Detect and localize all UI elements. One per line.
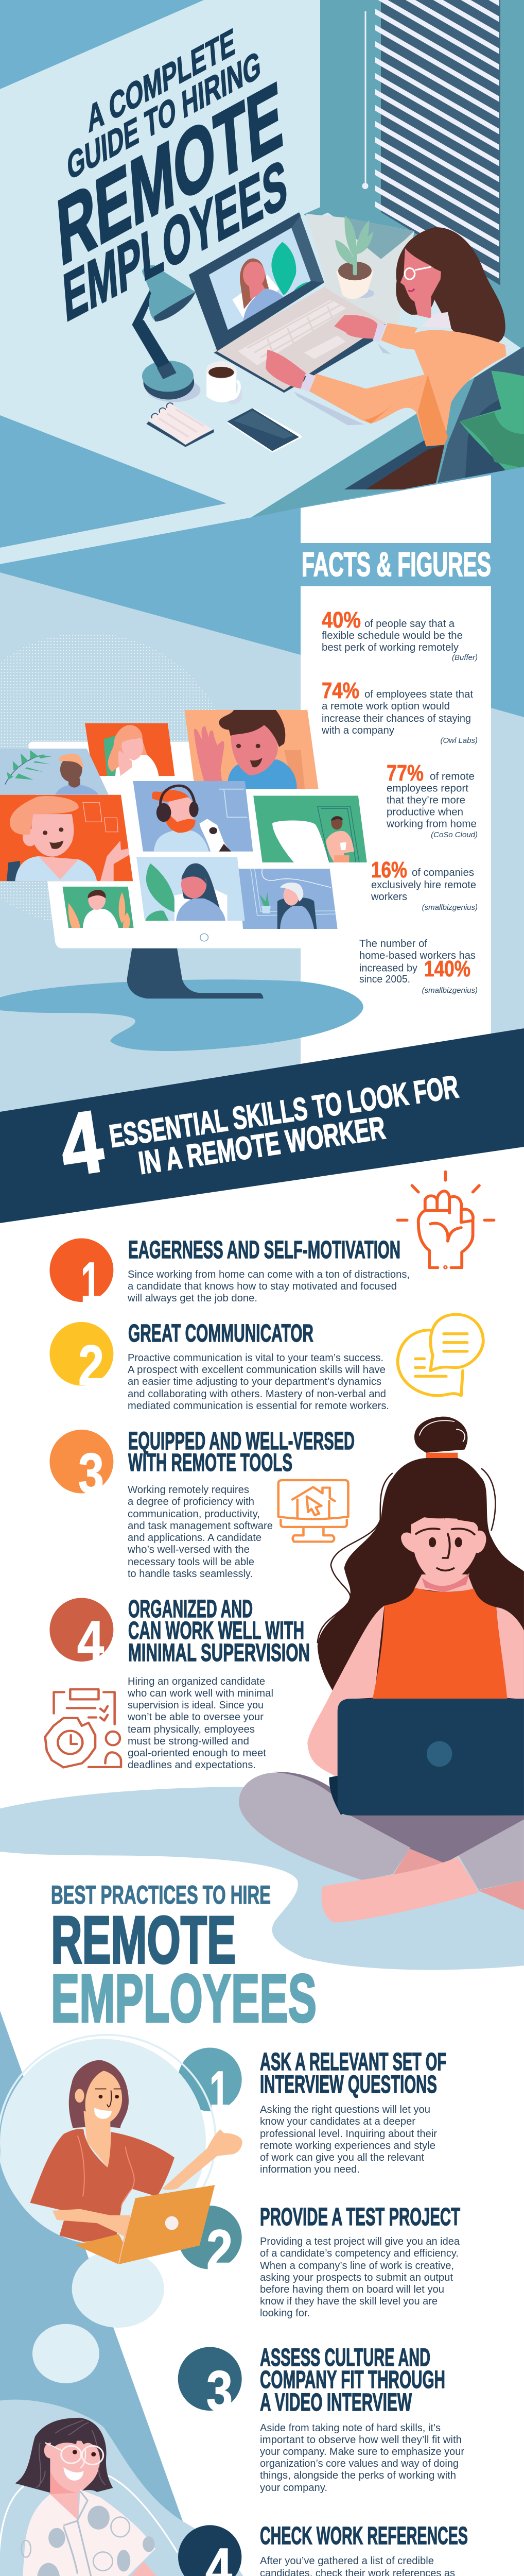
- skill 1: will always get the job done.: [127, 1293, 257, 1304]
- practice 4: After you’ve gathered a list of credible: [260, 2555, 434, 2567]
- skill 4: supervision is ideal. Since you: [128, 1700, 264, 1711]
- stat: 74 percent: increase their chances of staying: [322, 713, 471, 724]
- skill 3: who’s well-versed with the: [127, 1544, 250, 1555]
- stat: 40 percent: [322, 607, 478, 662]
- practice 2: know if they have the skill level you are: [260, 2296, 438, 2307]
- dotted circle background: [0, 633, 234, 926]
- number circle 1: 1: [81, 1251, 100, 1314]
- skill 4: [127, 1596, 310, 1771]
- icon: speech bubbles: [398, 1314, 483, 1396]
- practice 4: [259, 2522, 468, 2576]
- skill 4: who can work well with minimal: [127, 1688, 273, 1699]
- illustration: woman relaxing with laptop, cat and stool: [0, 2400, 411, 2576]
- number circle: practice 1: 1: [209, 2060, 229, 2123]
- number circle 4: [49, 1598, 113, 1673]
- heading: best practices to hire remote employees: EMPLOYEES: [51, 1960, 317, 2036]
- skill 3: and applications. A candidate: [128, 1532, 261, 1544]
- stat: 77 percent: productive when: [387, 807, 463, 818]
- practice 3: your company.: [260, 2482, 327, 2494]
- hair and face: [15, 2418, 113, 2521]
- stat: 140 percent: 140%: [424, 956, 470, 981]
- skill 4: CAN WORK WELL WITH: [128, 1617, 304, 1645]
- heading: 4 essential skills: [54, 1069, 461, 1195]
- hair: [318, 1458, 524, 1699]
- practice 1: [260, 2048, 446, 2175]
- tablet body: [28, 742, 334, 948]
- practice 3: your company. Make sure to emphasize your: [260, 2446, 464, 2458]
- legs: [239, 1772, 524, 1923]
- skill 2: and collaborating with others. Mastery of non-verbal and: [128, 1388, 386, 1400]
- practice 1: professional level. Inquiring about their: [260, 2128, 437, 2140]
- number circle 4: [178, 2525, 241, 2576]
- number circle: practice 1: [178, 2047, 242, 2123]
- stat: 140 percent: home-based workers has: [359, 950, 476, 961]
- practice 2: looking for.: [260, 2308, 310, 2319]
- stat: 77 percent: [386, 760, 478, 839]
- video panel: man with mug at door: [253, 795, 367, 863]
- number circle 2: [49, 1322, 113, 1397]
- panel: white facts column: [301, 475, 491, 1101]
- illustration: desk objects and woman: [132, 212, 524, 489]
- skill 3: WITH REMOTE TOOLS: [128, 1449, 292, 1477]
- stat: 74 percent: 74%: [322, 678, 359, 703]
- icon: coffee mug: [206, 361, 242, 404]
- video panel: woman with leaf: [136, 857, 245, 921]
- practice 2: asking your prospects to submit an output: [260, 2272, 453, 2283]
- skill 1: [127, 1236, 410, 1304]
- skill 3: to handle tasks seamlessly.: [128, 1568, 253, 1580]
- number circle: practice 2: [178, 2206, 242, 2282]
- stat: 40 percent: 40%: [322, 607, 361, 633]
- practice 2: Providing a test project will give you an idea: [260, 2236, 460, 2247]
- icon: desk lamp: [132, 265, 201, 402]
- panel: hero desk scene: [0, 0, 524, 564]
- practice 1: information you need.: [260, 2164, 360, 2175]
- number circle: practice 3: 3: [206, 2360, 233, 2423]
- icon: monitor with house: [278, 1480, 348, 1541]
- stat: 16 percent: exclusively hire remote: [371, 879, 476, 891]
- skill 4: Hiring an organized candidate: [128, 1676, 265, 1687]
- face: [401, 1500, 486, 1592]
- stat: 74 percent: with a company: [321, 725, 394, 736]
- skill 4: won’t be able to oversee your: [127, 1711, 264, 1723]
- tablet home button: [200, 934, 208, 941]
- stat: 77 percent: 77%: [387, 760, 424, 786]
- number circle 4: 4: [77, 1609, 104, 1673]
- number circle: practice 3: [178, 2347, 242, 2423]
- body: [307, 1587, 524, 1777]
- stat: 16 percent: workers: [371, 891, 407, 903]
- stat: 74 percent: of employees state that: [364, 689, 473, 700]
- skill 2: mediated communication is essential for remote workers.: [128, 1400, 389, 1412]
- stat: 16 percent: (smallbizgenius): [422, 903, 478, 912]
- practice 1: Asking the right questions will let you: [260, 2104, 430, 2115]
- stat: 74 percent: (Owl Labs): [440, 736, 478, 745]
- icon: raised fist: [398, 1172, 494, 1268]
- skill 4: deadlines and expectations.: [128, 1759, 256, 1771]
- shirt: [21, 2489, 155, 2576]
- title: a complete guide to hiring remote employees: EMPLOYEES: [61, 145, 289, 336]
- video panel: man with palm: [0, 749, 109, 795]
- number circle 3: [49, 1430, 113, 1505]
- skill 2: [128, 1320, 389, 1412]
- practice 1: remote working experiences and style: [260, 2140, 435, 2151]
- stat: 40 percent: of people say that a: [364, 618, 455, 630]
- skill 3: communication, productivity,: [128, 1509, 260, 1520]
- skill 4: must be strong-willed and: [128, 1736, 249, 1747]
- skill 4: MINIMAL SUPERVISION: [128, 1639, 310, 1667]
- panel: skills heading band: [0, 1028, 524, 1223]
- practice 2: before having them on board will let you: [260, 2284, 444, 2295]
- icons: skill numbers circles: [49, 1239, 113, 1673]
- stat: 77 percent: of remote: [430, 771, 475, 782]
- stat: 16 percent: [371, 857, 478, 912]
- stat: 77 percent: working from home: [386, 818, 477, 829]
- practice 3: A VIDEO INTERVIEW: [260, 2389, 412, 2416]
- skill 2: A prospect with excellent communication skills will have: [128, 1364, 386, 1376]
- skill 1: Since working from home can come with a ton of distractions,: [128, 1269, 410, 1280]
- blue floor shape: [0, 979, 363, 1051]
- icon: laptop: [189, 212, 386, 393]
- video panel: woman on orange: [85, 723, 175, 776]
- skill 4: goal-oriented enough to meet: [128, 1748, 266, 1759]
- heading: 4 essential skills: IN A REMOTE WORKER: [136, 1110, 388, 1181]
- skill 3: necessary tools will be able: [128, 1556, 254, 1568]
- practice 3: important to observe how well they’ll fit with: [260, 2434, 462, 2446]
- stat: 40 percent: flexible schedule would be the: [322, 630, 463, 641]
- video panel: man waving: [184, 710, 319, 789]
- blind cord: [362, 11, 369, 189]
- skill 3: a degree of proficiency with: [128, 1496, 254, 1507]
- icon: clipboard gear and person: [45, 1689, 121, 1767]
- skill 1: a candidate that knows how to stay motivated and focused: [128, 1281, 397, 1292]
- number circle 2: 2: [78, 1334, 104, 1397]
- practice 2: [260, 2204, 460, 2319]
- skill 3: EQUIPPED AND WELL-VERSED: [128, 1428, 355, 1455]
- tablet stand: [127, 948, 264, 998]
- title: a complete guide to hiring remote employees: [54, 21, 289, 336]
- illustration: tablet with video call panels: [0, 710, 367, 998]
- practice 1: of work can give you all the relevant: [260, 2152, 424, 2163]
- number circle 3: 3: [78, 1442, 104, 1505]
- video panel: man at window: [238, 869, 338, 929]
- chair blob: [0, 2400, 256, 2576]
- blue wave background: [0, 1787, 524, 1970]
- stat: 140 percent: [359, 938, 478, 995]
- practice 1: know your candidates at a deeper: [260, 2116, 415, 2127]
- video panel: man speaking on orange: [0, 795, 133, 881]
- heading: best practices to hire remote employees: BEST PRACTICES TO HIRE: [51, 1880, 271, 1909]
- stat: 77 percent: employees report: [387, 783, 468, 794]
- window blinds: [375, 0, 500, 285]
- number circle 1: [49, 1239, 113, 1314]
- number circle: practice 2: 2: [206, 2218, 233, 2282]
- skill 2: an easier time adjusting to your department’s dynamics: [128, 1376, 381, 1387]
- stat: 77 percent: (CoSo Cloud): [431, 831, 478, 839]
- stat: 74 percent: a remote work option would: [322, 701, 450, 712]
- skill 2: Proactive communication is vital to your team’s success.: [128, 1352, 383, 1364]
- blue side shape: [0, 2011, 268, 2576]
- stat: 140 percent: increased by: [359, 962, 417, 974]
- icon: notebook: [146, 403, 214, 447]
- skill 3: Working remotely requires: [128, 1484, 249, 1496]
- skill 3: and task management software: [128, 1520, 273, 1532]
- practice 3: Aside from taking note of hard skills, it’s: [260, 2422, 441, 2434]
- icon: smartphone: [227, 409, 303, 453]
- arm: [130, 2562, 181, 2576]
- chair outline: [0, 2474, 241, 2576]
- illustration: woman at laptop: [266, 227, 506, 446]
- skill 4: ORGANIZED AND: [128, 1596, 253, 1623]
- stat: 140 percent: since 2005.: [359, 974, 410, 985]
- illustration: woman presenting with laptop: [30, 2060, 242, 2264]
- heading: 4 essential skills: 4: [54, 1092, 109, 1195]
- illustration: light blobs behind woman: [0, 2035, 216, 2383]
- panel: facts background: [0, 0, 524, 1133]
- laptop: [329, 1699, 524, 1816]
- stat: 40 percent: best perk of working remotely: [322, 642, 459, 653]
- practice 2: of a candidate’s competency and efficiency.: [260, 2248, 459, 2259]
- practice 3: organization’s core values and way of doing: [260, 2458, 459, 2469]
- facts list: [321, 607, 478, 995]
- hair bun: [414, 1417, 467, 1458]
- practice 3: things, alongside the perks of working with: [260, 2470, 456, 2481]
- stat: 140 percent: The number of: [359, 938, 427, 950]
- heading: best practices to hire remote employees: [51, 1880, 317, 2036]
- stat: 74 percent: [321, 678, 478, 745]
- stat: 16 percent: 16%: [371, 857, 407, 883]
- practice 2: When a company’s line of work is creative,: [260, 2260, 454, 2272]
- stat: 16 percent: of companies: [412, 867, 474, 878]
- stat: 40 percent: (Buffer): [452, 653, 478, 662]
- stat: 140 percent: (smallbizgenius): [422, 986, 478, 995]
- icon: potted plant: [335, 215, 374, 299]
- practice 3: [260, 2344, 464, 2494]
- video panel: man in green: [62, 887, 134, 928]
- illustration: chair and plant: [344, 347, 524, 489]
- stat: 77 percent: that they’re more: [387, 794, 465, 806]
- video panel: man with headphones and cat: [133, 781, 253, 852]
- skill 4: team physically, employees: [128, 1724, 255, 1735]
- illustration: woman with laptop sitting cross-legged: [239, 1417, 524, 1923]
- skill 3: [127, 1428, 355, 1580]
- heading: best practices to hire remote employees: REMOTE: [51, 1902, 236, 1977]
- skill 2: GREAT COMMUNICATOR: [128, 1320, 313, 1347]
